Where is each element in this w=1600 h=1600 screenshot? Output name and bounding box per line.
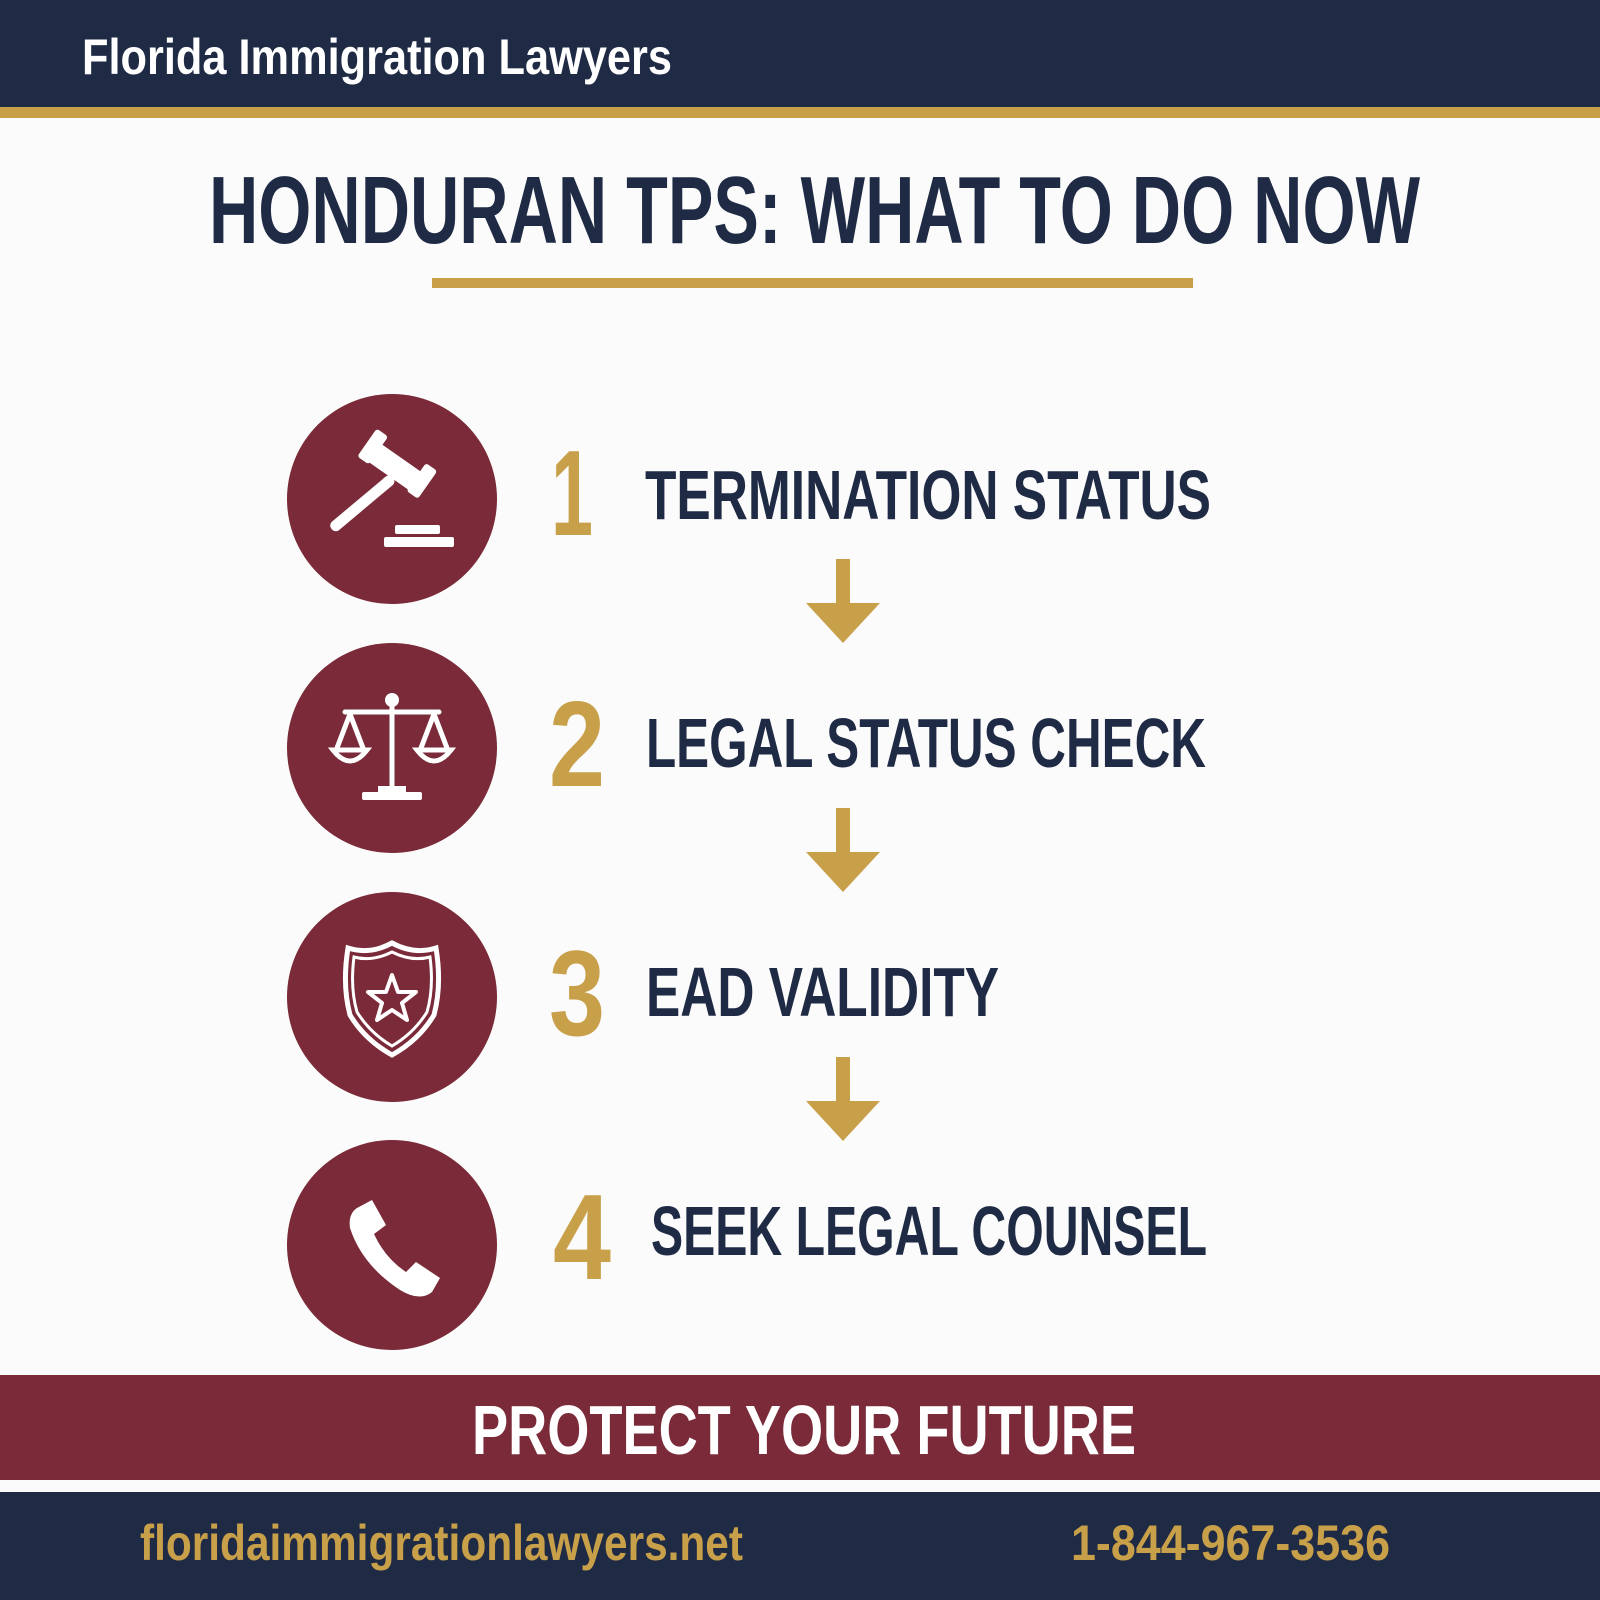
arrow 1 — [806, 559, 880, 643]
number 4: 4 — [553, 1169, 611, 1305]
label: TERMINATION STATUS — [645, 456, 1211, 534]
step 3 — [287, 892, 999, 1102]
footer — [0, 1492, 1600, 1600]
header bar — [0, 0, 1600, 118]
title underline — [432, 278, 1193, 288]
number 2: 2 — [549, 676, 605, 812]
step 2 — [287, 643, 1206, 853]
website: floridaimmigrationlawyers.net — [140, 1515, 743, 1571]
header text: Florida Immigration Lawyers — [82, 29, 672, 85]
icon: phone — [287, 1140, 497, 1350]
banner: protect your future — [0, 1375, 1600, 1480]
step 4 — [287, 1140, 1207, 1350]
label: LEGAL STATUS CHECK — [646, 704, 1206, 782]
label: SEEK LEGAL COUNSEL — [651, 1192, 1207, 1270]
label: EAD VALIDITY — [646, 953, 999, 1031]
phone number: 1-844-967-3536 — [1071, 1515, 1390, 1571]
number 3: 3 — [549, 925, 605, 1061]
step 1 — [287, 394, 1211, 604]
banner: protect your future: PROTECT YOUR FUTURE — [472, 1391, 1136, 1469]
icon: gavel — [287, 394, 497, 604]
number 1: 1 — [551, 425, 593, 561]
arrow 2 — [806, 808, 880, 892]
icon: scales — [287, 643, 497, 853]
arrow 3 — [806, 1057, 880, 1141]
icon: shield badge — [287, 892, 497, 1102]
